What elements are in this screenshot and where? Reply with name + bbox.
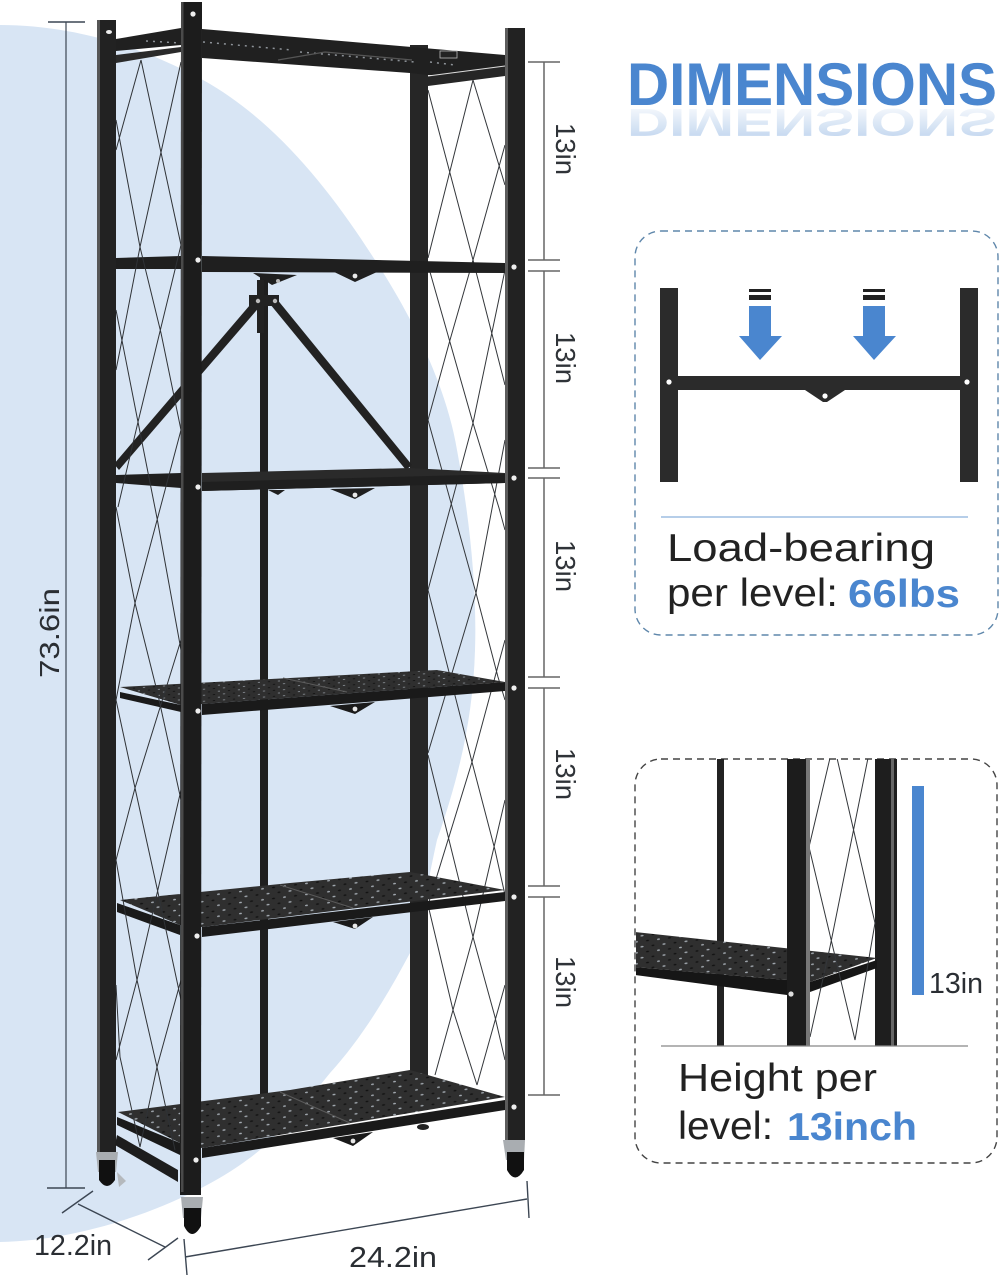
depth dimension 12.2in: 12.2in — [34, 1230, 112, 1262]
left side cross wires — [116, 60, 181, 1150]
panel: height per level — [635, 758, 997, 1163]
per-level height dimensions 13in: 13in — [550, 956, 581, 1008]
front posts — [106, 2, 525, 1195]
load-bearing caption: 66lbs — [848, 573, 960, 616]
per-level height dimensions 13in: 13in — [550, 332, 581, 384]
width dimension 24.2in: 24.2in — [349, 1242, 437, 1274]
title: DIMENSIONS: DIMENSIONS — [627, 101, 997, 144]
shelf level 2 — [116, 256, 505, 285]
load-bearing caption — [667, 527, 960, 616]
shelf level 4 — [120, 670, 505, 715]
title: DIMENSIONS: DIMENSIONS — [627, 51, 997, 118]
per-level height dimensions 13in: 13in — [550, 748, 581, 800]
rack close-up — [635, 758, 897, 1046]
per-level height dimensions 13in: 13in — [550, 123, 581, 175]
height bar — [912, 786, 924, 995]
height caption: level: — [678, 1105, 773, 1148]
right side cross wires — [428, 80, 505, 1085]
background blue arc — [0, 25, 475, 1242]
depth dimension 12.2in — [34, 1191, 178, 1262]
rack: folding shelf unit — [96, 2, 525, 1234]
back posts and centre pole — [97, 20, 428, 1152]
height caption: 13inch — [787, 1106, 917, 1149]
load arrow right — [853, 289, 896, 360]
shelf level 6 — [115, 1070, 505, 1182]
height caption — [678, 1057, 917, 1149]
shelf level 3 — [116, 468, 505, 499]
per-level height dimensions 13in: 13in — [550, 540, 581, 592]
load arrow left — [739, 289, 782, 360]
top shelf — [116, 28, 505, 86]
per-level height dimensions 13in — [528, 62, 581, 1095]
load-bearing caption: Load-bearing — [667, 527, 935, 570]
shelf level 5 — [117, 872, 505, 937]
load-bearing caption: per level: — [667, 572, 838, 615]
overall height dimension 73.6in — [34, 22, 85, 1188]
height caption: Height per — [678, 1057, 877, 1100]
post bolts — [193, 257, 517, 1163]
casters — [96, 1140, 525, 1234]
shelf cross-section icon — [660, 288, 978, 482]
panel: load-bearing — [635, 231, 998, 635]
overall height dimension 73.6in: 73.6in — [34, 588, 65, 678]
folding struts — [114, 280, 412, 470]
width dimension 24.2in — [184, 1181, 529, 1275]
13in label: 13in — [929, 968, 983, 1000]
